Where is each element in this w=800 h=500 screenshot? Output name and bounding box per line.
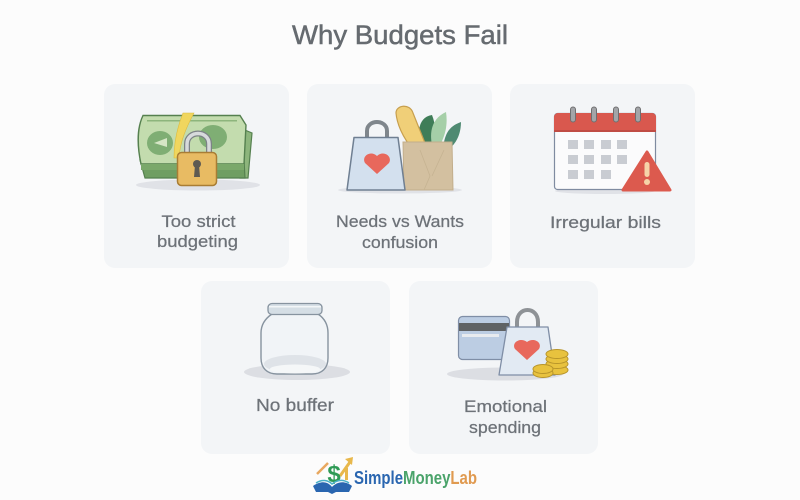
icon: shopping bag and grocery bag xyxy=(338,106,462,194)
label: too strict budgeting xyxy=(157,212,238,251)
label: emotional spending: spending xyxy=(469,418,541,437)
logo wordmark: SimpleMoneyLab xyxy=(354,468,477,488)
label: needs vs wants confusion xyxy=(336,212,464,252)
label: needs vs wants confusion: confusion xyxy=(362,233,438,252)
icon: calendar with warning triangle xyxy=(554,107,670,194)
icon: book with dollar sign and arrow xyxy=(313,457,353,494)
icon: credit card, shopping bag and coins xyxy=(447,310,568,380)
label: too strict budgeting: budgeting xyxy=(157,232,238,251)
icon: empty jar xyxy=(244,304,350,380)
label: too strict budgeting: Too strict xyxy=(162,212,236,231)
panel: emotional spending xyxy=(409,281,598,454)
panel: no buffer xyxy=(201,281,390,454)
title: Why Budgets Fail xyxy=(292,20,508,50)
panel: needs vs wants confusion xyxy=(307,84,492,268)
panel: irregular bills xyxy=(510,84,695,268)
label: emotional spending xyxy=(464,397,547,437)
label: no buffer: No buffer xyxy=(256,395,334,415)
label: emotional spending: Emotional xyxy=(464,397,547,416)
icon: cash stack with padlock xyxy=(136,113,260,190)
label: needs vs wants confusion: Needs vs Wants xyxy=(336,212,464,231)
label: irregular bills: Irregular bills xyxy=(550,213,661,232)
icon: book with dollar sign and arrow: $ xyxy=(327,461,341,488)
logo: SimpleMoneyLab xyxy=(313,457,477,494)
panel: too strict budgeting xyxy=(104,84,289,268)
